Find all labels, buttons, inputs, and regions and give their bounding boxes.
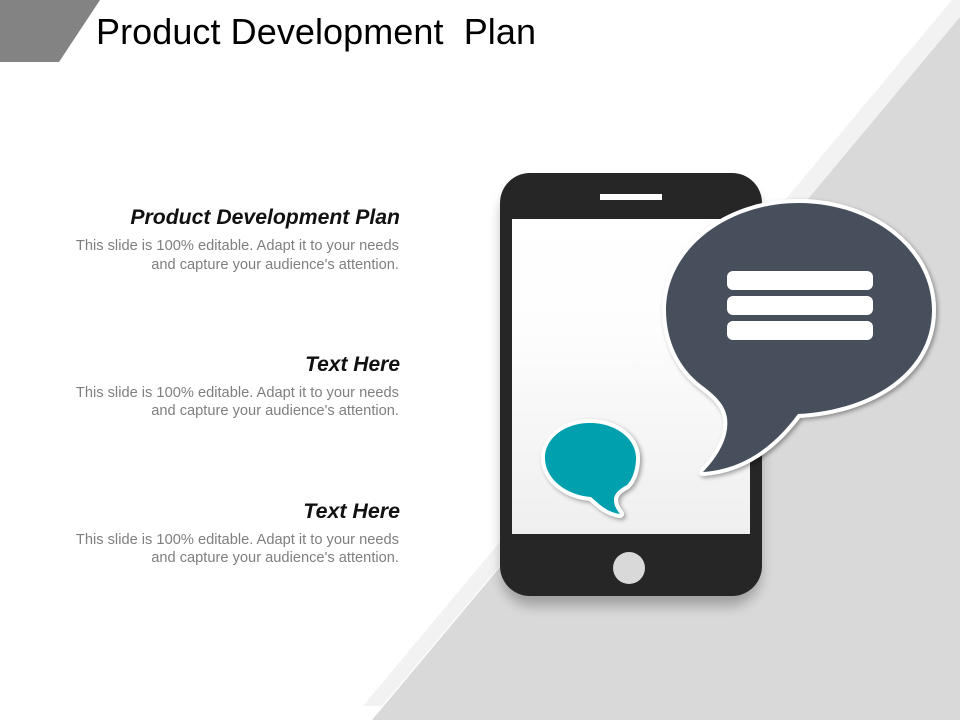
heading 3: Text Here [303, 499, 400, 523]
phone screen [512, 219, 750, 534]
large dark speech bubble [666, 203, 932, 472]
heading 1: Product Development Plan [130, 206, 400, 229]
message lines icon [727, 271, 873, 340]
text block 2 [76, 353, 400, 419]
small teal speech bubble [545, 423, 636, 514]
title tab [0, 0, 100, 62]
background light diagonal band [363, 0, 960, 706]
description 2 [76, 385, 399, 419]
description 3: This slide is 100% editable. Adapt it to your needs [76, 532, 399, 548]
description 3 [76, 532, 399, 566]
text block 1 [76, 206, 400, 273]
background gray diagonal panel [372, 17, 960, 720]
title: Product Development Plan [96, 11, 536, 52]
description 2: This slide is 100% editable. Adapt it to your needs [76, 385, 399, 401]
description 1 [76, 238, 399, 273]
description 2: and capture your audience's attention. [151, 403, 399, 419]
phone icon [500, 173, 762, 606]
description 1: This slide is 100% editable. Adapt it to your needs [76, 238, 399, 254]
phone body [500, 173, 762, 596]
description 3: and capture your audience's attention. [151, 550, 399, 566]
heading 2: Text Here [305, 353, 400, 376]
description 1: and capture your audience's attention. [151, 257, 399, 273]
phone home button [613, 552, 645, 584]
phone speaker [600, 194, 662, 200]
text block 3 [76, 499, 400, 566]
